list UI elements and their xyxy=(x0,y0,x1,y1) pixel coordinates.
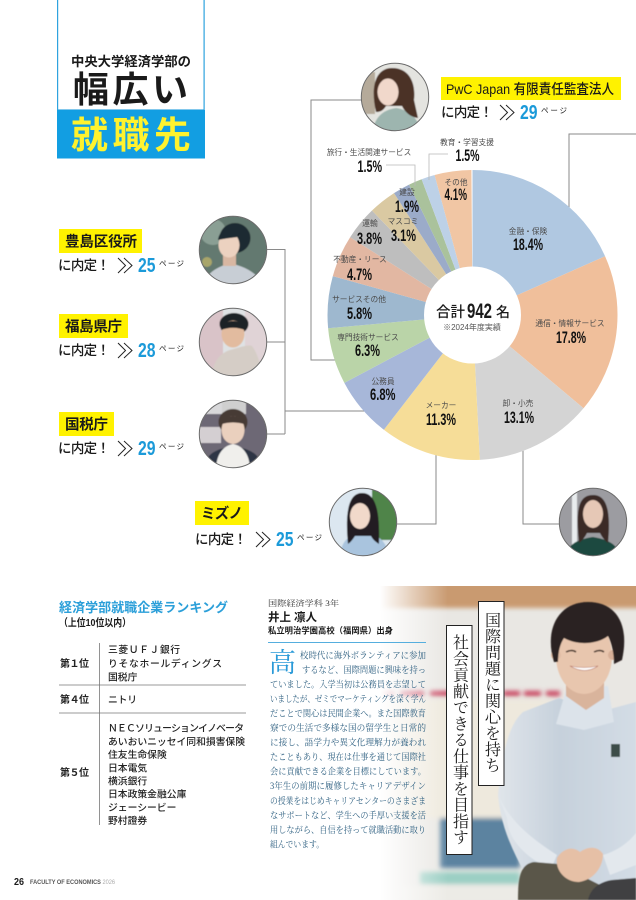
slice labels: 1.9% xyxy=(395,197,419,216)
slice labels: 卸・小売 xyxy=(503,398,534,408)
slice labels: マスコミ xyxy=(388,217,418,226)
student story: 3年生の前期に履修したキャリアデザイン xyxy=(270,780,426,791)
slice labels: メーカー xyxy=(426,401,456,410)
vertical headline: first line: 国際問題に関心を持ち xyxy=(482,612,500,773)
ranking heading: 経済学部就職企業ランキング xyxy=(59,600,228,615)
student story: 校時代に海外ボランティアに参加 xyxy=(300,650,426,660)
photo: student portrait xyxy=(370,580,636,900)
footer xyxy=(14,876,115,888)
callout: 豊島区役所: 25 xyxy=(138,255,156,277)
callout: 福島県庁 xyxy=(58,314,184,362)
student profile: 国際経済学科 3年 xyxy=(268,598,339,608)
student story: いましたが、ゼミでマーケティングを深く学ん xyxy=(270,693,426,704)
photo fade overlay xyxy=(380,586,448,900)
donut chart: employment by industry xyxy=(386,154,545,388)
slice labels: 6.8% xyxy=(370,385,396,404)
portrait: 卸・小売 student xyxy=(559,488,627,560)
footer: 26 xyxy=(14,876,24,888)
slice labels: 教育・学習支援 xyxy=(440,137,494,147)
slice labels: サービスその他 xyxy=(332,294,386,304)
student story: 高 xyxy=(269,648,296,678)
ranking table: ＮＥＣソリューションイノベータ xyxy=(108,722,244,734)
slice labels: 11.3% xyxy=(426,410,456,429)
callout: 国税庁: 29 xyxy=(138,438,156,460)
slice labels: 旅行・生活関連サービス xyxy=(327,147,411,157)
callout: 国税庁: 国税庁 xyxy=(65,416,108,434)
shirt xyxy=(498,698,636,900)
student story: の授業をはじめキャリアセンターのさまざま xyxy=(270,795,426,806)
slice labels: その他 xyxy=(444,177,468,187)
ranking table: 国税庁 xyxy=(108,670,138,684)
slice labels: 専門技術サービス xyxy=(337,332,399,342)
ranking table: 日本政策金融公庫 xyxy=(108,788,187,800)
donut center: total xyxy=(436,300,510,332)
face xyxy=(556,636,612,694)
slice labels: 通信・情報サービス xyxy=(535,318,605,328)
slice labels: 不動産・リース xyxy=(333,254,387,264)
slice labels: 4.7% xyxy=(347,265,372,284)
ranking table: 三菱ＵＦＪ銀行 xyxy=(108,643,180,656)
callout: PwC Japan: 29 xyxy=(520,102,538,124)
title: small heading: 中央大学経済学部の xyxy=(71,53,191,69)
student profile xyxy=(268,598,426,642)
ranking table: ジェーシービー xyxy=(108,801,176,814)
callout: ミズノ: ページ xyxy=(297,533,322,542)
ranking table: 野村證券 xyxy=(108,814,147,827)
ranking table: 第１位 xyxy=(60,657,89,670)
student story: たこともあり、現在は仕事を通じて国際社 xyxy=(270,751,426,762)
student story: 組んでいます。 xyxy=(270,838,324,850)
slice labels: 運輸 xyxy=(362,218,378,228)
callout: 福島県庁: 28 xyxy=(138,340,156,362)
slice labels xyxy=(327,137,605,429)
portrait: ミズノ student xyxy=(329,488,397,560)
callout: ミズノ: ミズノ xyxy=(201,504,243,522)
hands xyxy=(557,848,603,882)
donut center: total: 942 xyxy=(467,300,492,323)
donut center: total: 合計 xyxy=(436,304,465,321)
ranking table: 住友生命保険 xyxy=(108,748,167,761)
slice labels: 13.1% xyxy=(504,408,534,427)
vertical headline: second line xyxy=(446,626,472,854)
donut center: total: 名 xyxy=(496,304,510,320)
slice labels: 1.5% xyxy=(358,157,382,176)
callout: PwC Japan: に内定！ xyxy=(441,105,493,120)
student profile: 井上 凛人 xyxy=(268,610,318,624)
ranking table xyxy=(59,600,246,827)
student story xyxy=(269,648,426,850)
ranking table: 第５位 xyxy=(60,766,89,779)
slice labels: 3.1% xyxy=(391,226,416,245)
portrait: 豊島区役所 student xyxy=(199,216,267,290)
callout: 豊島区役所: 豊島区役所 xyxy=(65,232,138,250)
portrait: PwC Japan student xyxy=(361,63,429,134)
ranking table: （上位10位以内） xyxy=(59,616,131,629)
vertical headline: second line: 社会貢献できる仕事を目指す xyxy=(450,634,468,845)
title block: 就職先 xyxy=(71,115,191,156)
callout: 国税庁 xyxy=(58,412,184,460)
slice labels: 4.1% xyxy=(444,185,467,204)
callout: 福島県庁: 福島県庁 xyxy=(65,318,122,336)
callout: 豊島区役所 xyxy=(58,229,184,277)
ranking table: 横浜銀行 xyxy=(108,774,147,788)
neck xyxy=(566,682,604,710)
callout: ミズノ xyxy=(195,501,322,551)
ranking table: あいおいニッセイ同和損害保険 xyxy=(108,735,245,748)
callout: PwC Japan: ページ xyxy=(541,106,568,115)
ranking table: りそなホールディングス xyxy=(108,657,222,670)
slice labels: 6.3% xyxy=(355,341,380,360)
slice labels: 公務員 xyxy=(371,376,395,386)
slice labels: 1.5% xyxy=(456,146,480,165)
student story: ていました。入学当初は公務員を志望して xyxy=(270,678,426,690)
callout: 豊島区役所: に内定！ xyxy=(58,258,110,273)
student profile: 私立明治学園高校（福岡県）出身 xyxy=(268,624,393,636)
slice labels: 5.8% xyxy=(347,304,372,323)
footer: FACULTY OF ECONOMICS 2026 xyxy=(30,879,115,886)
slice labels: 3.8% xyxy=(357,229,382,248)
callout: PwC Japan: PwC Japan 有限責任監査法人 xyxy=(446,81,614,97)
trousers xyxy=(517,862,600,900)
student story: だことで関心は民間企業へ。また国際教育 xyxy=(270,708,426,718)
portrait: 国税庁 student xyxy=(199,400,267,470)
slice labels: 金融・保険 xyxy=(509,226,548,236)
connector lines xyxy=(267,100,636,524)
callout: PwC Japan xyxy=(441,77,621,124)
callout: 福島県庁: ページ xyxy=(159,344,184,353)
student story: 用しながら、自信を持って就職活動に取り xyxy=(270,824,426,835)
student story: なサポートなど、学生への手厚い支援を活 xyxy=(270,810,426,820)
callout: 福島県庁: に内定！ xyxy=(58,343,110,358)
slice labels: 18.4% xyxy=(513,235,543,254)
slice labels: 建設 xyxy=(399,187,415,197)
student story: に接し、語学力や異文化理解力が養われ xyxy=(270,736,426,748)
student story: するなど、国際問題に興味を持っ xyxy=(302,664,426,675)
callout: ミズノ: 25 xyxy=(276,529,294,551)
callout: ミズノ: に内定！ xyxy=(195,532,247,547)
callout: 国税庁: に内定！ xyxy=(58,441,110,456)
ranking table: 日本電気 xyxy=(108,762,147,774)
title block xyxy=(57,0,205,158)
callout: 国税庁: ページ xyxy=(159,442,184,451)
vertical headline: first line xyxy=(478,602,504,786)
student story: 寮での生活で多様な国の留学生と日常的 xyxy=(270,722,426,733)
student story: 会に貢献できる企業を目標にしています。 xyxy=(270,766,426,776)
slice labels: 17.8% xyxy=(556,328,586,347)
portrait: 福島県庁 student xyxy=(199,308,267,380)
donut center: total: ※2024年度実績 xyxy=(443,322,501,332)
callout: 豊島区役所: ページ xyxy=(159,259,184,268)
title block: 幅広い xyxy=(73,69,188,110)
hair xyxy=(551,602,624,664)
ranking table: ニトリ xyxy=(108,695,137,706)
ranking table: 第４位 xyxy=(60,693,89,706)
